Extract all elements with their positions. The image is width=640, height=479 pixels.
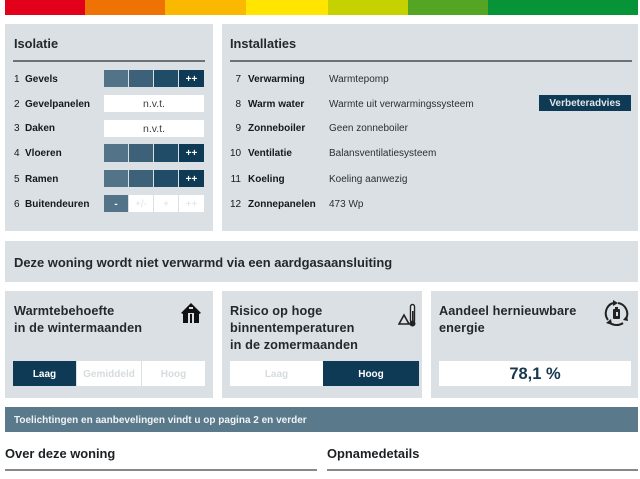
icon: thermometer warning <box>398 304 416 326</box>
row 2 Gevelpanelen: 2 <box>14 99 20 110</box>
panel: Warmtebehoefte <box>5 291 213 398</box>
rating 6: - <box>114 199 118 210</box>
heading: Warmtebehoefte: in de wintermaanden <box>14 321 142 335</box>
rating 2 <box>104 95 204 112</box>
scale: Hoog: Hoog <box>161 369 186 380</box>
row 12 Zonnepanelen: 473 Wp <box>329 199 363 210</box>
value: 78,1 %: 78,1 % <box>509 365 561 383</box>
row 4 Vloeren: Vloeren <box>25 148 62 159</box>
icon: renewable cycle <box>604 300 628 326</box>
row 2 Gevelpanelen: Gevelpanelen <box>25 99 90 110</box>
heading: Over deze woning: Over deze woning <box>5 446 115 461</box>
rating 3 <box>104 120 204 137</box>
notice band <box>5 407 638 432</box>
heading: Opnamedetails: Opnamedetails <box>327 446 419 461</box>
scale: Laag <box>230 361 323 386</box>
row 9 Zonneboiler <box>235 123 408 134</box>
heading: Risico <box>230 304 358 352</box>
heading: Installaties: Installaties <box>230 36 296 51</box>
row 11 Koeling: Koeling <box>248 174 285 185</box>
heading: Warmtebehoefte <box>14 304 142 335</box>
row 4 Vloeren: 4 <box>14 148 20 159</box>
heading: Isolatie: Isolatie <box>14 36 58 51</box>
row 8 Warm water: Warmte uit verwarmingssysteem <box>329 99 474 110</box>
scale: Hoog: Hoog <box>358 369 384 380</box>
rating 6 <box>104 195 204 212</box>
row 8 Warm water <box>235 99 474 110</box>
rating 1 <box>104 70 204 87</box>
row 8 Warm water: Warm water <box>248 99 304 110</box>
row 7 Verwarming: Verwarming <box>248 74 305 85</box>
banner: gas connection <box>5 241 638 282</box>
rating 4: ++ <box>186 148 197 159</box>
row 11 Koeling: Koeling aanwezig <box>329 174 407 185</box>
row 10 Ventilatie: Balansventilatiesysteem <box>329 148 436 159</box>
scale: Laag <box>13 361 76 386</box>
heading: Aandeel: Aandeel hernieuwbare <box>439 304 576 318</box>
rating 3: n.v.t. <box>143 123 165 135</box>
rating 6: ++ <box>186 199 197 210</box>
rating 5: ++ <box>186 174 197 185</box>
rating 6: +/- <box>135 199 147 210</box>
row 10 Ventilatie <box>230 148 436 159</box>
notice text: Toelichtingen en aanbevelingen vindt u op pagina 2 en verder <box>14 415 307 426</box>
scale: Hoog <box>142 361 205 386</box>
heading: Risico: Risico op hoge <box>230 304 322 318</box>
panel: Isolatie <box>5 24 213 231</box>
heading: Warmtebehoefte: Warmtebehoefte <box>14 304 114 318</box>
panel: Installaties <box>222 24 638 231</box>
scale: Laag: Laag <box>33 369 56 380</box>
row 12 Zonnepanelen: Zonnepanelen <box>248 199 316 210</box>
button: Verbeteradvies: Verbeteradvies <box>549 98 621 109</box>
scale: Laag: Laag <box>265 369 288 380</box>
rating 6: + <box>163 199 169 210</box>
panel: Risico <box>222 291 422 398</box>
row 5 Ramen: Ramen <box>25 174 58 185</box>
row 8 Warm water: 8 <box>235 99 241 110</box>
row 10 Ventilatie: Ventilatie <box>248 148 292 159</box>
panel: Aandeel hernieuwbare energie <box>431 291 638 398</box>
row 3 Daken: 3 <box>14 123 20 134</box>
row 7 Verwarming: 7 <box>235 74 241 85</box>
scale: Hoog <box>323 361 419 386</box>
value: 78,1 % <box>439 361 631 386</box>
heading: Risico: binnentemperaturen <box>230 321 354 335</box>
row 7 Verwarming <box>235 74 389 85</box>
heading: Risico: in de zomermaanden <box>230 338 358 352</box>
scale: Gemiddeld: Gemiddeld <box>83 369 135 380</box>
row 7 Verwarming: Warmtepomp <box>329 74 389 85</box>
row 11 Koeling <box>231 174 407 185</box>
row 1 Gevels: 1 <box>14 74 20 85</box>
energy label colour bar <box>5 0 638 15</box>
row 10 Ventilatie: 10 <box>230 148 241 159</box>
icon: house <box>181 303 201 323</box>
row 12 Zonnepanelen <box>230 199 363 210</box>
row 1 Gevels: Gevels <box>25 74 58 85</box>
banner text: Deze woning wordt niet verwarmd via een aardgasaansluiting <box>14 255 392 270</box>
heading: Aandeel: energie <box>439 321 485 335</box>
row 5 Ramen: 5 <box>14 174 20 185</box>
row 11 Koeling: 11 <box>231 174 241 185</box>
rating 4 <box>104 144 204 162</box>
button: Verbeteradvies <box>539 95 631 111</box>
rating 2: n.v.t. <box>143 98 165 110</box>
heading: Aandeel <box>439 304 576 335</box>
row 6 Buitendeuren: 6 <box>14 199 20 210</box>
rating 1: ++ <box>186 74 197 85</box>
row 9 Zonneboiler: 9 <box>235 123 241 134</box>
row 9 Zonneboiler: Geen zonneboiler <box>329 123 408 134</box>
row 9 Zonneboiler: Zonneboiler <box>248 123 305 134</box>
rating 5 <box>104 170 204 187</box>
row 3 Daken: Daken <box>25 123 55 134</box>
row 6 Buitendeuren: Buitendeuren <box>25 199 89 210</box>
row 12 Zonnepanelen: 12 <box>230 199 241 210</box>
scale: Gemiddeld <box>77 361 141 386</box>
